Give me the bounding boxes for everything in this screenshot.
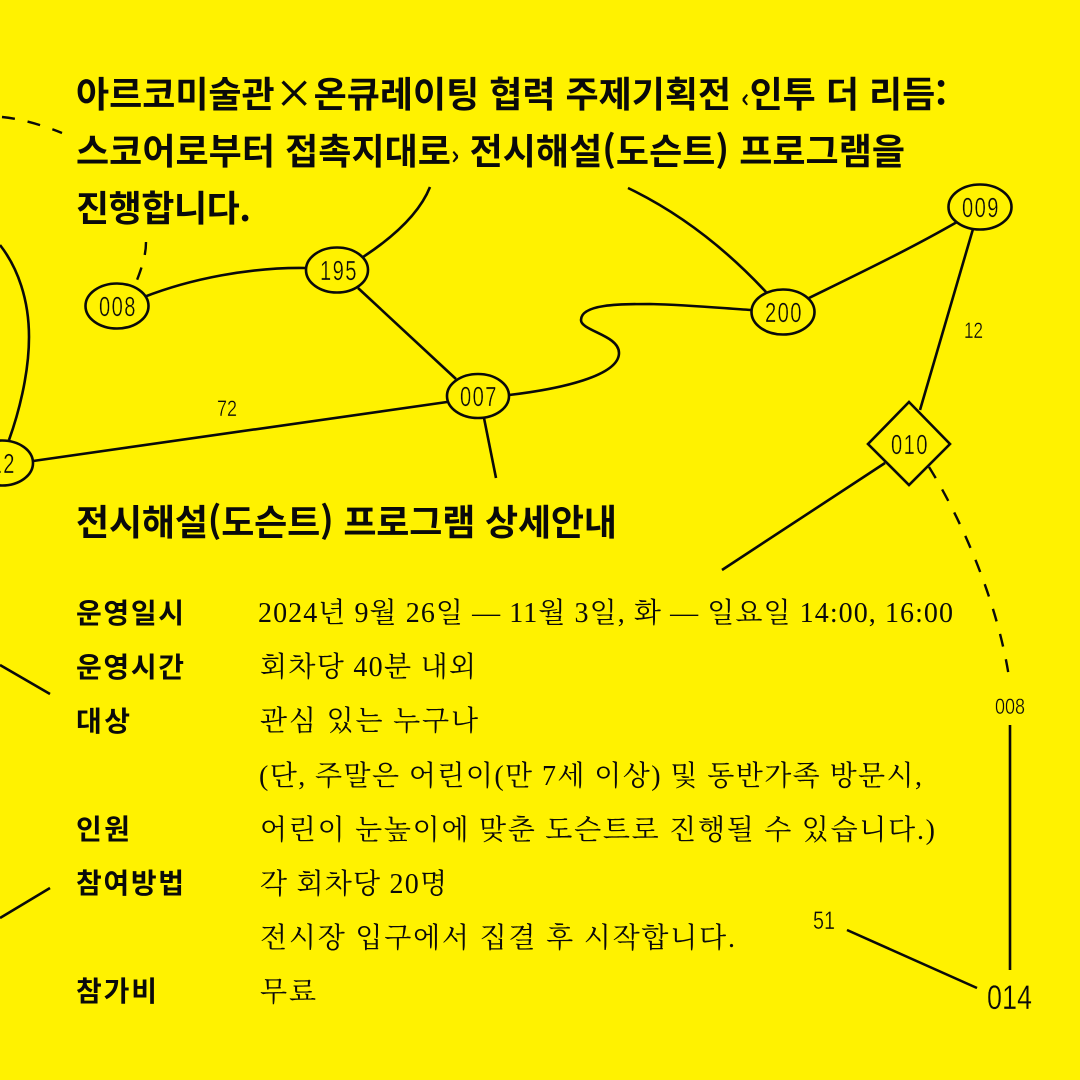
link: 200 to 009 xyxy=(809,222,957,298)
link: left upper stub xyxy=(0,665,50,694)
title: × xyxy=(275,64,314,120)
node 009: 009 xyxy=(962,193,1000,224)
detail labels: 참여방법 xyxy=(76,862,184,902)
node 002 xyxy=(0,440,33,486)
label 51: 51 xyxy=(813,907,835,935)
title: 온큐레이팅 협력 주제기획전 xyxy=(314,66,741,118)
link: 007 downward xyxy=(484,418,496,478)
label 72: 72 xyxy=(217,396,237,421)
title: 진행합니다. xyxy=(76,180,251,232)
detail labels xyxy=(76,592,184,1010)
detail values: 관심 있는 누구나 xyxy=(260,705,478,737)
node 010 diamond xyxy=(868,402,950,485)
node 008 xyxy=(86,284,148,328)
detail values xyxy=(258,597,953,1008)
dashed link: above 008 xyxy=(134,242,146,288)
node 007 xyxy=(447,374,509,418)
node 007: 007 xyxy=(460,382,498,413)
link: 008 to 195 xyxy=(144,268,306,297)
link: 51 to 014 xyxy=(847,930,977,988)
link: 007 to 200 wavy xyxy=(509,304,751,395)
link: 009 to 010 xyxy=(920,229,973,410)
title: ‹인투 더 리듬: xyxy=(741,66,947,118)
dashed link: top left xyxy=(2,117,62,133)
detail labels: 운영시간 xyxy=(76,646,184,686)
node 200: 200 xyxy=(765,298,803,329)
link: 002 to 007 xyxy=(33,402,447,461)
dashed link: 010 to 008 label xyxy=(929,467,1010,684)
node 008: 008 xyxy=(99,292,137,323)
detail labels: 대상 xyxy=(76,700,130,740)
link: left curve xyxy=(0,245,29,440)
title xyxy=(76,64,947,232)
link: 008 label to 014 xyxy=(1009,725,1011,970)
detail values: 각 회차당 20명 xyxy=(260,868,447,900)
node 010 diamond: 010 xyxy=(891,430,929,461)
link: 195 to 007 xyxy=(358,288,456,379)
network diagram xyxy=(0,117,1032,1017)
detail values: 2024년 9월 26일 — 11월 3일, 화 — 일요일 14:00, 16:00 xyxy=(258,597,953,629)
label 008 small: 008 xyxy=(995,694,1025,719)
label 014: 014 xyxy=(987,979,1032,1017)
title: 스코어로부터 접촉지대로› 전시해설(도슨트) 프로그램을 xyxy=(76,123,905,175)
node 200 xyxy=(752,290,814,334)
detail values: 무료 xyxy=(260,977,316,1008)
link: 195 upward xyxy=(363,187,430,257)
node 009 xyxy=(948,184,1012,230)
detail labels: 참가비 xyxy=(76,970,157,1010)
label 12: 12 xyxy=(964,318,983,343)
link: 010 lower left xyxy=(722,463,885,570)
detail values: (단, 주말은 어린이(만 7세 이상) 및 동반가족 방문시, xyxy=(259,760,922,792)
node 195: 195 xyxy=(320,256,358,287)
title: 아르코미술관 xyxy=(76,66,275,118)
detail labels: 운영일시 xyxy=(76,592,184,632)
subheading: 전시해설(도슨트) 프로그램 상세안내 xyxy=(76,494,617,546)
link: left lower stub xyxy=(0,888,50,918)
detail values: 회차당 40분 내외 xyxy=(260,651,476,683)
detail values: 어린이 눈높이에 맞춘 도슨트로 진행될 수 있습니다.) xyxy=(260,814,935,846)
node 195 xyxy=(306,248,368,292)
detail values: 전시장 입구에서 집결 후 시작합니다. xyxy=(260,922,735,954)
link: top to 200 xyxy=(628,188,766,292)
detail labels: 인원 xyxy=(76,808,130,848)
